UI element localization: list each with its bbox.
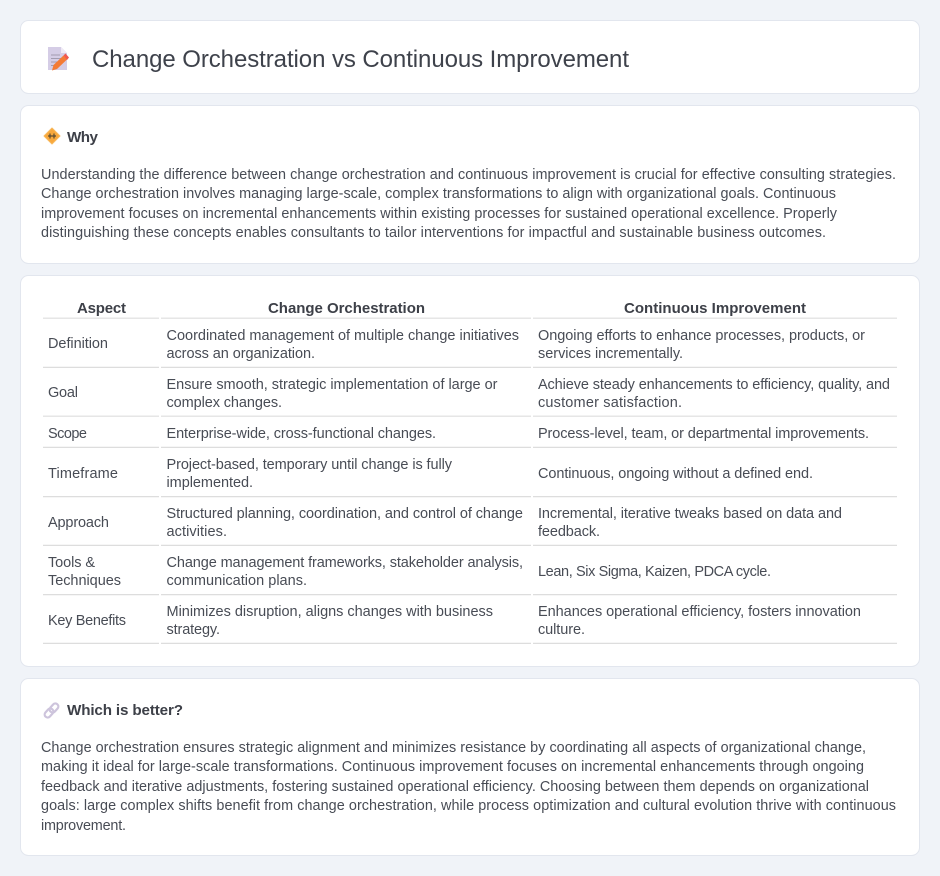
title: Change Orchestration vs Continuous Improvement — [92, 46, 629, 73]
row: tools and techniques: communication plans. — [166, 573, 307, 589]
row: goal: Goal — [48, 385, 78, 401]
why text block: distinguishing these concepts enables consultants to tailor interventions for impactful and sustainable business outcomes. — [41, 225, 826, 241]
row: key benefits: culture. — [538, 622, 585, 638]
row: tools and techniques — [48, 555, 771, 589]
row: key benefits: Minimizes disruption, aligns changes with business — [166, 604, 493, 620]
icon: warning diamond — [44, 128, 60, 144]
row: goal: Achieve steady enhancements to efficiency, quality, and — [538, 377, 890, 393]
row: approach: Structured planning, coordination, and control of change — [166, 506, 523, 522]
row: key benefits: strategy. — [166, 622, 220, 638]
row: key benefits — [48, 604, 861, 638]
which is better text block: goals: large complex shifts benefit from change orchestration, while process optimization and cultural evolution thrive with continuous — [41, 798, 896, 814]
which is better text block: improvement. — [41, 818, 126, 834]
icon: link — [43, 702, 60, 719]
table header row: Continuous Improvement — [624, 300, 806, 317]
row: tools and techniques: Change management frameworks, stakeholder analysis, — [166, 555, 523, 571]
row: scope — [48, 426, 869, 442]
table header row: Change Orchestration — [268, 300, 425, 317]
row: approach: Approach — [48, 515, 109, 531]
row: tools and techniques: Techniques — [48, 573, 121, 589]
heading: why: Why — [67, 129, 99, 146]
row: tools and techniques: Lean, Six Sigma, Kaizen, PDCA cycle. — [538, 564, 771, 580]
panel: why — [20, 106, 920, 264]
row: approach — [48, 506, 842, 540]
row: definition: across an organization. — [166, 346, 315, 362]
row: goal — [48, 377, 890, 411]
row: timeframe — [48, 457, 813, 491]
why text block — [41, 167, 896, 241]
which is better text block — [41, 740, 896, 834]
row: timeframe: Timeframe — [48, 466, 118, 482]
panel: comparison table — [20, 276, 920, 666]
row: approach: feedback. — [538, 524, 600, 540]
row: definition: Ongoing efforts to enhance processes, products, or — [538, 328, 865, 344]
why text block: improvement focuses on incremental enhancements within existing processes for sustained operational excellence. Properly — [41, 206, 838, 222]
why text block: Understanding the difference between change orchestration and continuous improvement is crucial for effective consulting strategies. — [41, 167, 896, 183]
row: definition: Definition — [48, 336, 108, 352]
table header row — [77, 300, 806, 317]
which is better text block: Change orchestration ensures strategic alignment and minimizes resistance by coordinating all aspects of organizational change, — [41, 740, 866, 756]
row: goal: complex changes. — [166, 395, 282, 411]
row: timeframe: Continuous, ongoing without a defined end. — [538, 466, 813, 482]
which is better text block: feedback and iterative adjustments, fostering sustained operational efficiency. Choosing between them depends on organizational — [41, 779, 869, 795]
panel: which is better — [20, 678, 920, 856]
row: scope: Scope — [48, 426, 87, 442]
row: approach: Incremental, iterative tweaks based on data and — [538, 506, 842, 522]
row: definition: services incrementally. — [538, 346, 683, 362]
row: definition: Coordinated management of multiple change initiatives — [166, 328, 519, 344]
panel: title header — [20, 20, 920, 94]
row: definition — [48, 328, 865, 362]
row: scope: Enterprise-wide, cross-functional changes. — [166, 426, 436, 442]
row: timeframe: implemented. — [166, 475, 253, 491]
table header row: Aspect — [77, 300, 126, 317]
row: approach: activities. — [166, 524, 227, 540]
heading: which is better: Which is better? — [67, 702, 183, 719]
row: goal: Ensure smooth, strategic implementation of large or — [166, 377, 498, 393]
row: key benefits: Enhances operational efficiency, fosters innovation — [538, 604, 861, 620]
row: scope: Process-level, team, or departmental improvements. — [538, 426, 869, 442]
row: key benefits: Key Benefits — [48, 613, 126, 629]
icon: document with pencil — [48, 47, 69, 70]
row: goal: customer satisfaction. — [538, 395, 682, 411]
row: tools and techniques: Tools & — [48, 555, 95, 571]
why text block: Change orchestration involves managing large-scale, complex transformations to align with organizational goals. Continuous — [41, 186, 836, 202]
row: timeframe: Project-based, temporary until change is fully — [166, 457, 453, 473]
which is better text block: making it ideal for large-scale transformations. Continuous improvement focuses on incremental enhancements through ongoing — [41, 759, 864, 775]
